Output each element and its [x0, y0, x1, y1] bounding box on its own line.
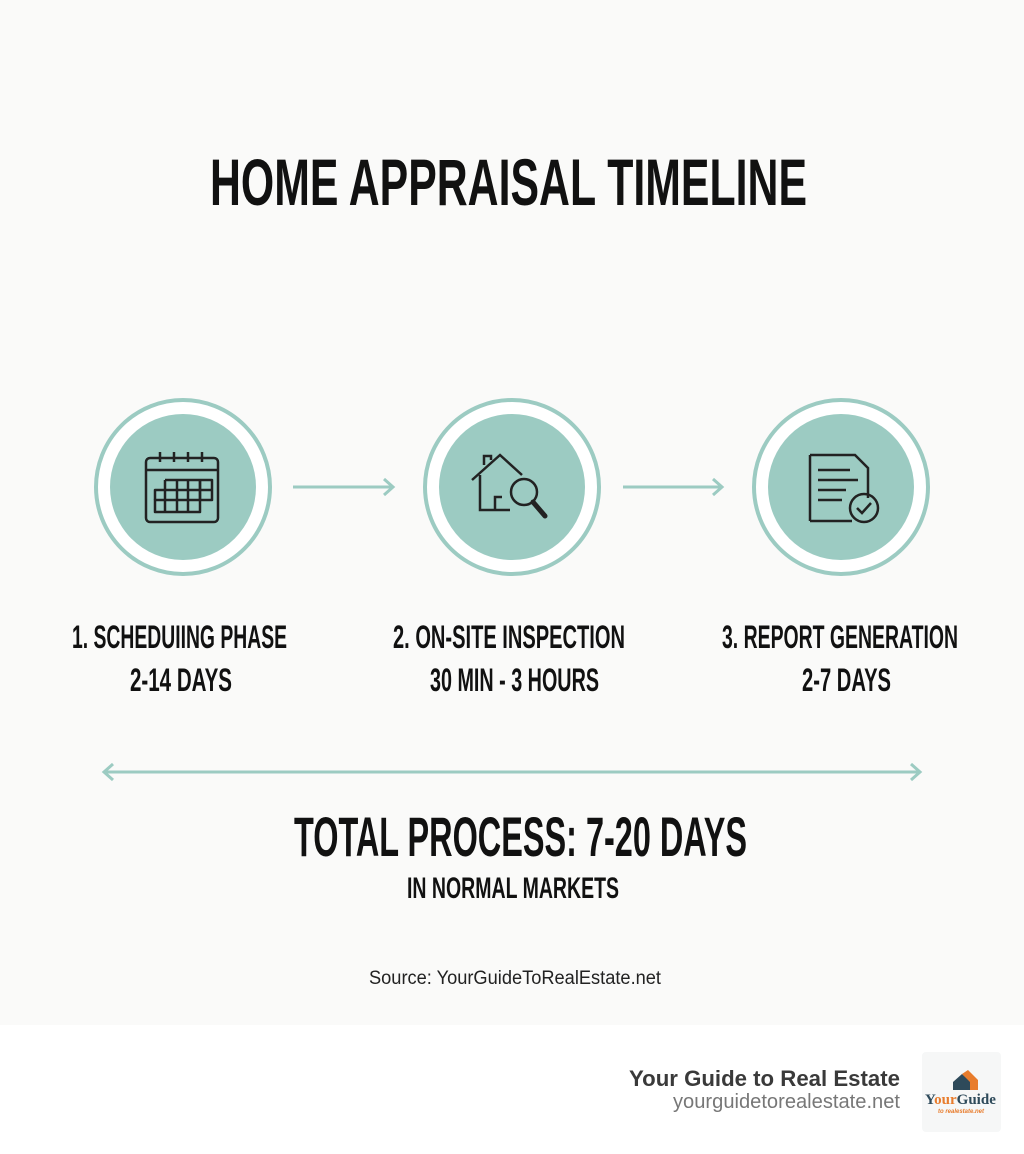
step labels: 1. SCHEDUIING PHASE [72, 619, 287, 655]
logo [922, 1052, 1001, 1132]
step labels: 2. ON-SITE INSPECTION [393, 619, 625, 655]
step labels: 2-14 DAYS [130, 662, 232, 698]
step labels: 2-7 DAYS [802, 662, 891, 698]
step 1 icon: calendar [96, 400, 270, 574]
step labels [72, 619, 958, 698]
subtitle: IN NORMAL MARKETS [407, 872, 619, 905]
logo: YourGuide [925, 1092, 996, 1108]
arrow 2 [623, 479, 722, 495]
footer brand [629, 1066, 900, 1113]
step labels: 30 MIN - 3 HOURS [430, 662, 599, 698]
source: Source: YourGuideToRealEstate.net [369, 968, 662, 989]
logo: to realestate.net [938, 1109, 985, 1115]
footer brand: Your Guide to Real Estate [629, 1066, 900, 1091]
footer brand: yourguidetorealestate.net [673, 1091, 900, 1113]
step 2 icon: house with magnifier [425, 400, 599, 574]
step 3 icon: report document [754, 400, 928, 574]
arrow 1 [293, 479, 393, 495]
double arrow [104, 764, 920, 780]
